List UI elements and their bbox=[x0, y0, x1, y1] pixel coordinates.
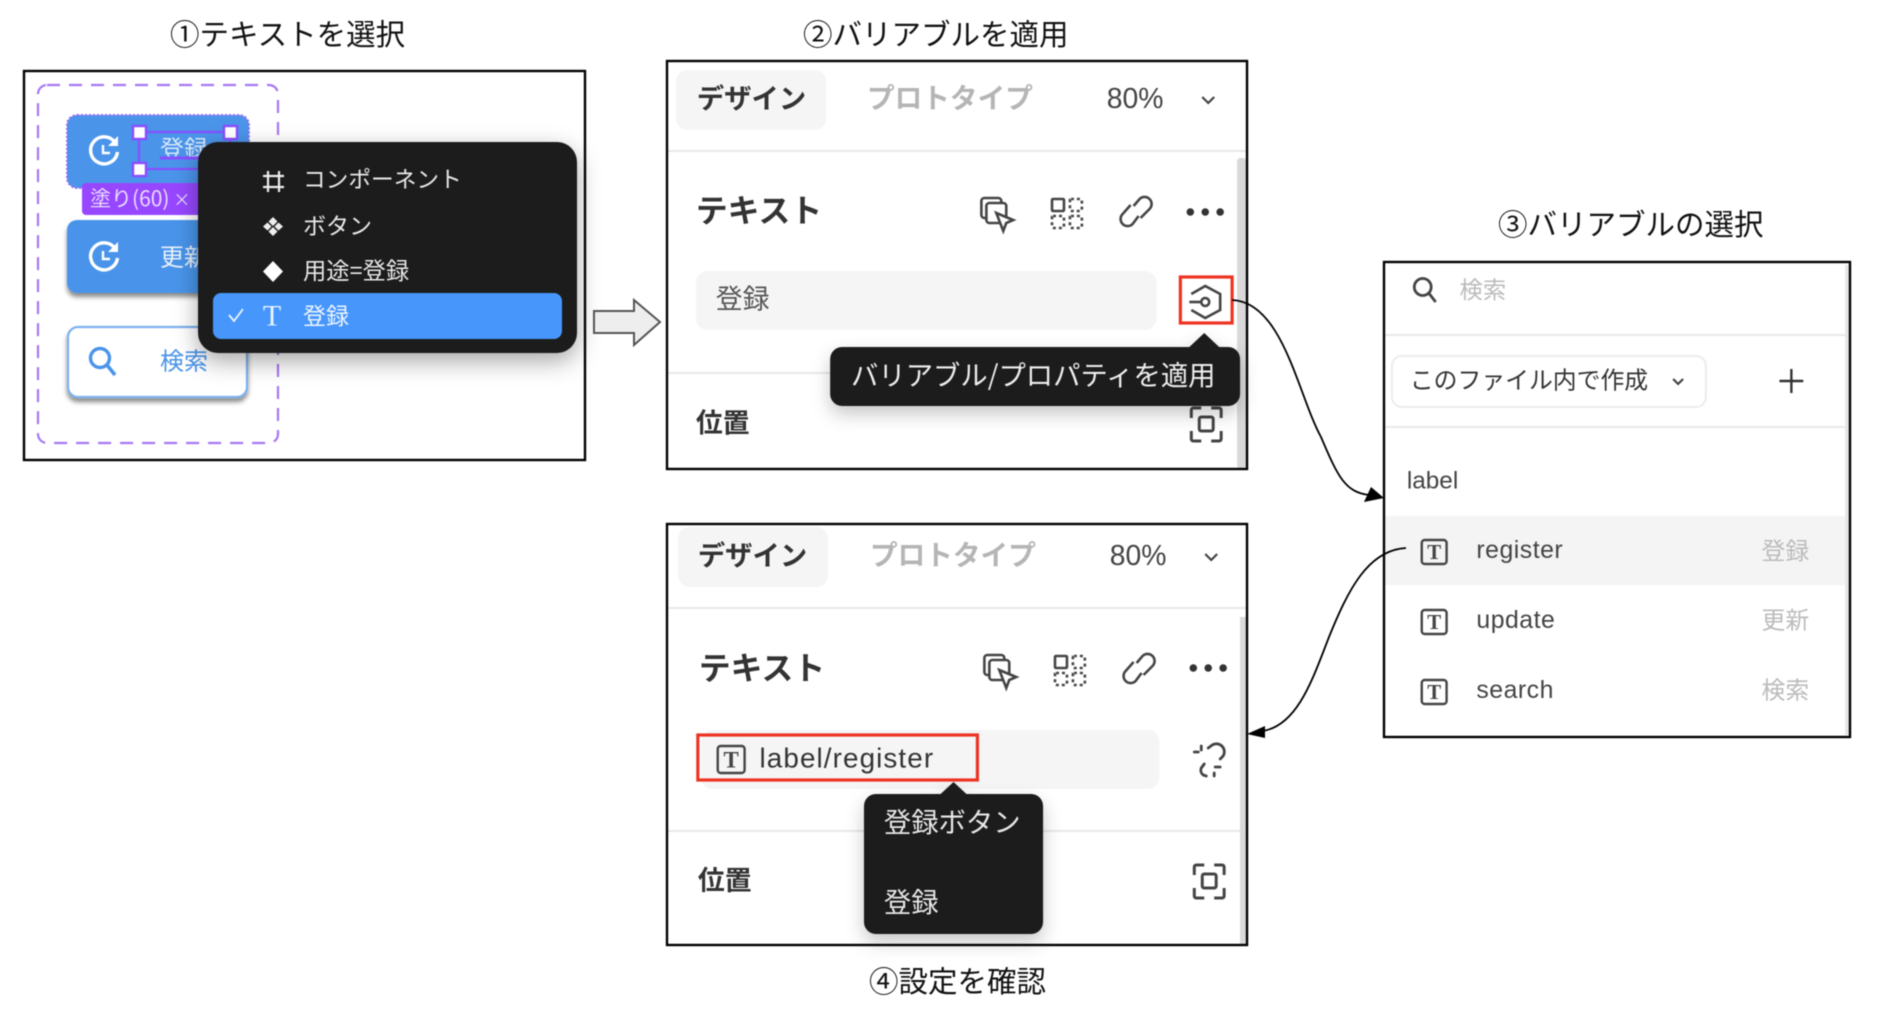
dark layer menu: ボタン bbox=[303, 207, 372, 241]
title: step 1: ①テキストを選択 bbox=[170, 12, 405, 54]
icon: more dots bbox=[1190, 664, 1227, 672]
panel: step 3 choose variable bbox=[1384, 262, 1850, 737]
icon: plus bbox=[1779, 369, 1803, 393]
row: search: T bbox=[1427, 680, 1441, 704]
tooltip: apply variable: バリアブル/プロパティを適用 bbox=[851, 353, 1216, 393]
panel: step 4 confirm setting: プロトタイプ bbox=[870, 533, 1036, 573]
panel: step 2 apply variable: 80% bbox=[1107, 83, 1163, 115]
dark layer menu: コンポーネント bbox=[303, 162, 462, 194]
button: update: 更新 bbox=[160, 238, 208, 272]
panel: step 4 confirm setting: 80% bbox=[1110, 540, 1166, 572]
panel: step 4 confirm setting: 位置 bbox=[698, 859, 752, 898]
panel: step 2 apply variable: テキスト bbox=[696, 186, 822, 232]
tooltip: variable description bbox=[864, 782, 1043, 934]
button: search: 検索 bbox=[160, 342, 208, 376]
button: update bbox=[67, 220, 249, 293]
dark layer menu: 用途=登録 bbox=[303, 252, 409, 286]
icon: focus frame bbox=[1194, 865, 1224, 898]
row: update: update bbox=[1476, 606, 1555, 634]
row: search: search bbox=[1476, 676, 1554, 704]
title: step 4: ④設定を確認 bbox=[869, 959, 1046, 1001]
row: register: 登録 bbox=[1762, 531, 1809, 567]
title: step 3: ③バリアブルの選択 bbox=[1498, 202, 1764, 244]
panel: step 1 select text bbox=[24, 71, 585, 460]
icon: component grid bbox=[1052, 199, 1082, 228]
icon: select matching bbox=[984, 655, 1016, 688]
dropdown: このファイル内で作成 bbox=[1410, 360, 1648, 396]
icon: link bbox=[1124, 654, 1155, 683]
panel: step 4 confirm setting: テキスト bbox=[699, 643, 825, 690]
icon: component grid bbox=[1055, 656, 1085, 685]
row: update: 更新 bbox=[1762, 600, 1809, 636]
panel: step 3 choose variable: label bbox=[1407, 467, 1458, 495]
icon: frame hash bbox=[263, 171, 284, 192]
panel: step 2 apply variable: デザイン bbox=[697, 76, 806, 116]
icon: link bbox=[1121, 197, 1152, 226]
size label: 塗り(60) × bbox=[90, 183, 190, 213]
panel: step 3 choose variable: 検索 bbox=[1460, 271, 1506, 305]
row: search bbox=[1422, 670, 1809, 706]
panel: step 4 confirm setting bbox=[667, 524, 1247, 945]
dark layer menu bbox=[198, 142, 577, 353]
arrow: step 3 to step 4 bbox=[1247, 548, 1406, 738]
icon: apply variable bbox=[1189, 286, 1220, 318]
row: register: register bbox=[1476, 536, 1563, 564]
row: register: T bbox=[1427, 540, 1441, 564]
panel: step 4 confirm setting: デザイン bbox=[698, 533, 807, 573]
button: search bbox=[68, 327, 247, 397]
button: register bbox=[67, 115, 249, 188]
title: step 2: ②バリアブルを適用 bbox=[803, 12, 1069, 54]
variable chip: T bbox=[724, 747, 739, 773]
row: update: T bbox=[1427, 610, 1441, 634]
red highlight bbox=[698, 735, 977, 780]
tooltip: variable description: 登録 bbox=[884, 880, 939, 920]
button: register: 登録 bbox=[160, 130, 208, 164]
icon: component diamonds bbox=[263, 217, 283, 236]
selected row: T bbox=[263, 300, 281, 332]
icon: detach variable bbox=[1194, 744, 1224, 776]
tooltip: variable description: 登録ボタン bbox=[884, 800, 1021, 840]
variable chip: label/register bbox=[760, 742, 934, 774]
icon: more dots bbox=[1187, 208, 1224, 216]
dashed purple frame bbox=[38, 85, 278, 443]
panel: step 2 apply variable: 登録 bbox=[716, 277, 770, 317]
tooltip: apply variable bbox=[830, 333, 1240, 406]
icon: focus frame bbox=[1191, 408, 1221, 441]
arrow: step 1 to step 2 bbox=[594, 300, 660, 345]
icon: select matching bbox=[981, 198, 1013, 231]
arrow: step 2 to step 3 bbox=[1232, 300, 1384, 502]
red highlight bbox=[1180, 277, 1232, 323]
panel: step 2 apply variable: プロトタイプ bbox=[867, 76, 1033, 116]
icon: variant diamond bbox=[263, 261, 283, 282]
selected row: 登録 bbox=[303, 297, 349, 331]
row: update bbox=[1422, 600, 1809, 636]
row: register bbox=[1422, 531, 1809, 567]
selected row bbox=[213, 293, 562, 339]
row: search: 検索 bbox=[1762, 670, 1809, 706]
dropdown bbox=[1392, 356, 1706, 407]
panel: step 2 apply variable: 位置 bbox=[696, 401, 750, 441]
panel: step 2 apply variable bbox=[667, 61, 1247, 469]
icon: search bbox=[1414, 278, 1436, 302]
